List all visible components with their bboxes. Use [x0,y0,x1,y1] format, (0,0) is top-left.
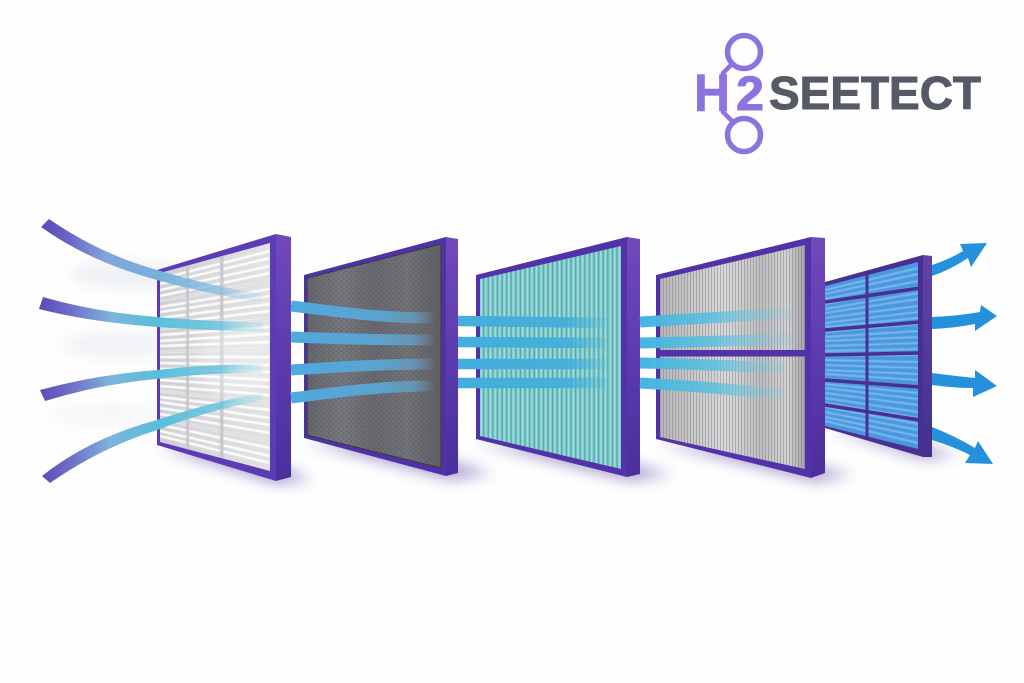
arrows: incoming airflow through filter 1 [39,219,263,483]
arrow: outflow 1 [932,243,987,276]
panel: filter 1 pre-filter [157,234,291,481]
arrows: airflow through filter 3 [458,321,612,383]
logo text: H2: H [694,64,730,123]
arrow: outflow 4 [932,427,993,464]
panel: filter 4 grey HEPA [656,237,825,478]
logo: H2SEETECT: 2 [736,68,764,121]
arrows: airflow through filter 2 [291,306,436,398]
panel: filter 3 teal pleated [476,237,640,477]
logo icon: molecule rings [723,36,760,152]
arrow: outflow 3 [932,370,997,397]
arrows: airflow through filter 4 [640,313,795,394]
soft shadows [50,261,957,484]
logo text: SEETECT: SEETECT [769,67,981,119]
logo: H2SEETECT [694,36,981,152]
arrow: outflow 2 [932,305,997,331]
panel: filter 5 blue final stage [825,255,932,457]
arrows: outgoing clean air [932,243,997,464]
panel: filter 2 activated carbon [304,237,458,476]
